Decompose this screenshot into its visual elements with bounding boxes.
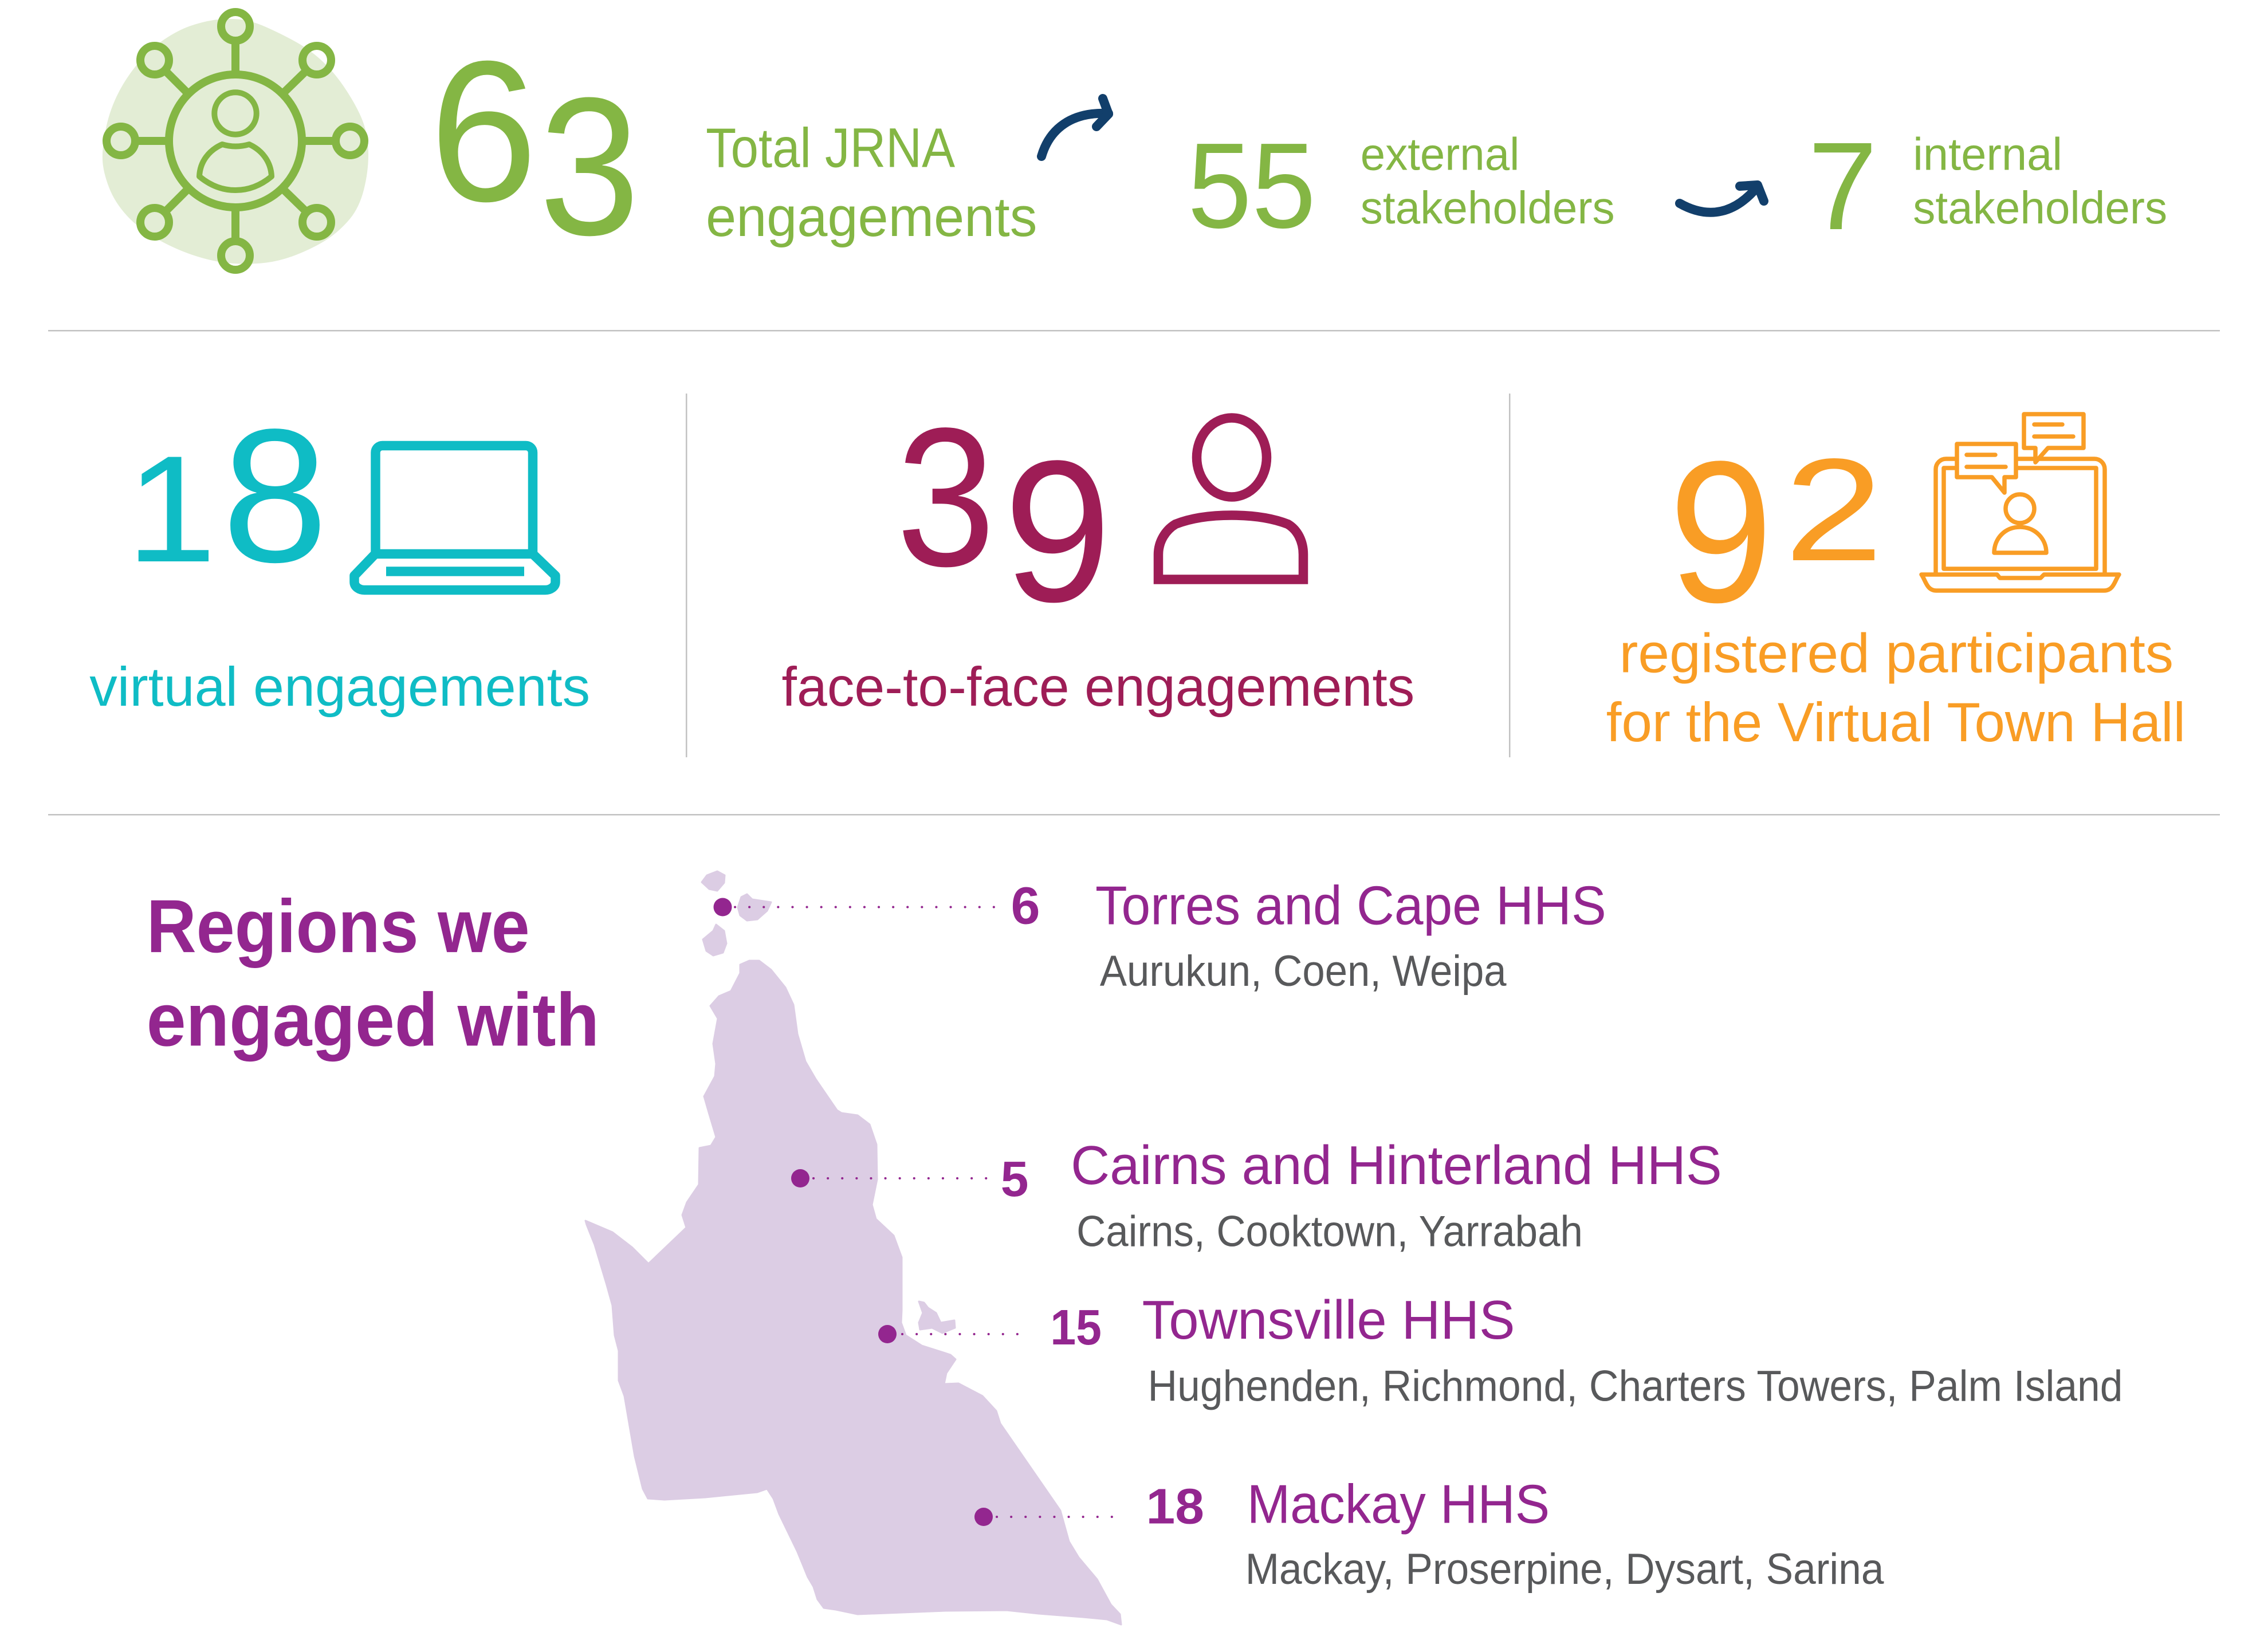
- label: internal stakeholders: internal: [1913, 129, 2062, 180]
- callout: Townsville HHS: Hughenden, Richmond, Charters Towers, Palm Island: [1148, 1362, 2123, 1410]
- heading: Regions we engaged with: [147, 884, 599, 1061]
- total number: 63: 3: [539, 57, 640, 276]
- callout: Cairns and Hinterland HHS: Cairns, Cooktown, Yarrabah: [1076, 1208, 1583, 1256]
- label: face-to-face engagements: face-to-face engagements: [782, 656, 1414, 718]
- icon: person: [1158, 418, 1303, 580]
- total number: 63: 6: [430, 19, 537, 243]
- number: 92 participants: 9: [1669, 419, 1773, 645]
- total number: 63: [430, 19, 640, 276]
- arrow to internal stakeholders: [1680, 185, 1764, 213]
- label: Total JRNA engagements: Total JRNA: [706, 117, 955, 179]
- callout: Torres and Cape HHS: Torres and Cape HHS: [1095, 875, 1606, 936]
- callout: Mackay HHS: Mackay, Proserpine, Dysart, Sarina: [1245, 1545, 1884, 1594]
- heading: Regions we engaged with: engaged with: [147, 977, 599, 1061]
- callout: Mackay HHS: 18: [1146, 1478, 1204, 1534]
- label: registered participants for the Virtual Town Hall: registered participants: [1620, 623, 2173, 684]
- label: Total JRNA engagements: engagements: [706, 186, 1037, 248]
- number: 39 face-to-face: [897, 387, 1111, 644]
- number: 55 external: 55: [1188, 117, 1316, 253]
- number: 92 participants: [1669, 419, 1884, 645]
- number: 18 virtual: 8: [222, 390, 328, 602]
- callout: Torres and Cape HHS: [714, 875, 1606, 996]
- icon: laptop with video call: [1921, 414, 2119, 591]
- label: Total JRNA engagements: [706, 117, 1037, 248]
- label: internal stakeholders: stakeholders: [1913, 182, 2167, 233]
- icon: laptop: [354, 446, 556, 590]
- callout: Townsville HHS: [878, 1290, 2123, 1410]
- label: virtual engagements: virtual engagements: [89, 656, 590, 718]
- label: external stakeholders: external: [1361, 129, 1519, 180]
- callout: Mackay HHS: [974, 1474, 1884, 1594]
- callout: Cairns and Hinterland HHS: 5: [1001, 1151, 1028, 1207]
- callout: Townsville HHS: 15: [1050, 1299, 1102, 1355]
- number: 39 face-to-face: 9: [1004, 419, 1111, 644]
- number: 18 virtual: [126, 390, 328, 602]
- callout: Cairns and Hinterland HHS: [791, 1135, 1722, 1256]
- number: 18 virtual: 1: [126, 424, 217, 594]
- arrow to external stakeholders: [1041, 99, 1109, 156]
- label: internal stakeholders: [1913, 129, 2167, 233]
- callout: Torres and Cape HHS: 6: [1011, 876, 1040, 935]
- label: external stakeholders: [1361, 129, 1615, 233]
- number: 7 internal: 7: [1808, 117, 1877, 256]
- label: registered participants for the Virtual Town Hall: [1606, 623, 2186, 753]
- number: 39 face-to-face: 3: [897, 387, 995, 608]
- label: registered participants for the Virtual Town Hall: for the Virtual Town Hall: [1606, 692, 2186, 753]
- label: external stakeholders: stakeholders: [1361, 182, 1615, 233]
- callout: Townsville HHS: Townsville HHS: [1142, 1290, 1515, 1351]
- callout: Torres and Cape HHS: Aurukun, Coen, Weipa: [1100, 947, 1507, 996]
- heading: Regions we engaged with: Regions we: [147, 884, 530, 968]
- callout: Cairns and Hinterland HHS: Cairns and Hinterland HHS: [1071, 1135, 1722, 1196]
- callout: Mackay HHS: Mackay HHS: [1247, 1474, 1550, 1535]
- number: 92 participants: 2: [1784, 428, 1884, 592]
- icon: stakeholder network: [103, 12, 368, 270]
- map of northern Queensland: [585, 871, 1121, 1625]
